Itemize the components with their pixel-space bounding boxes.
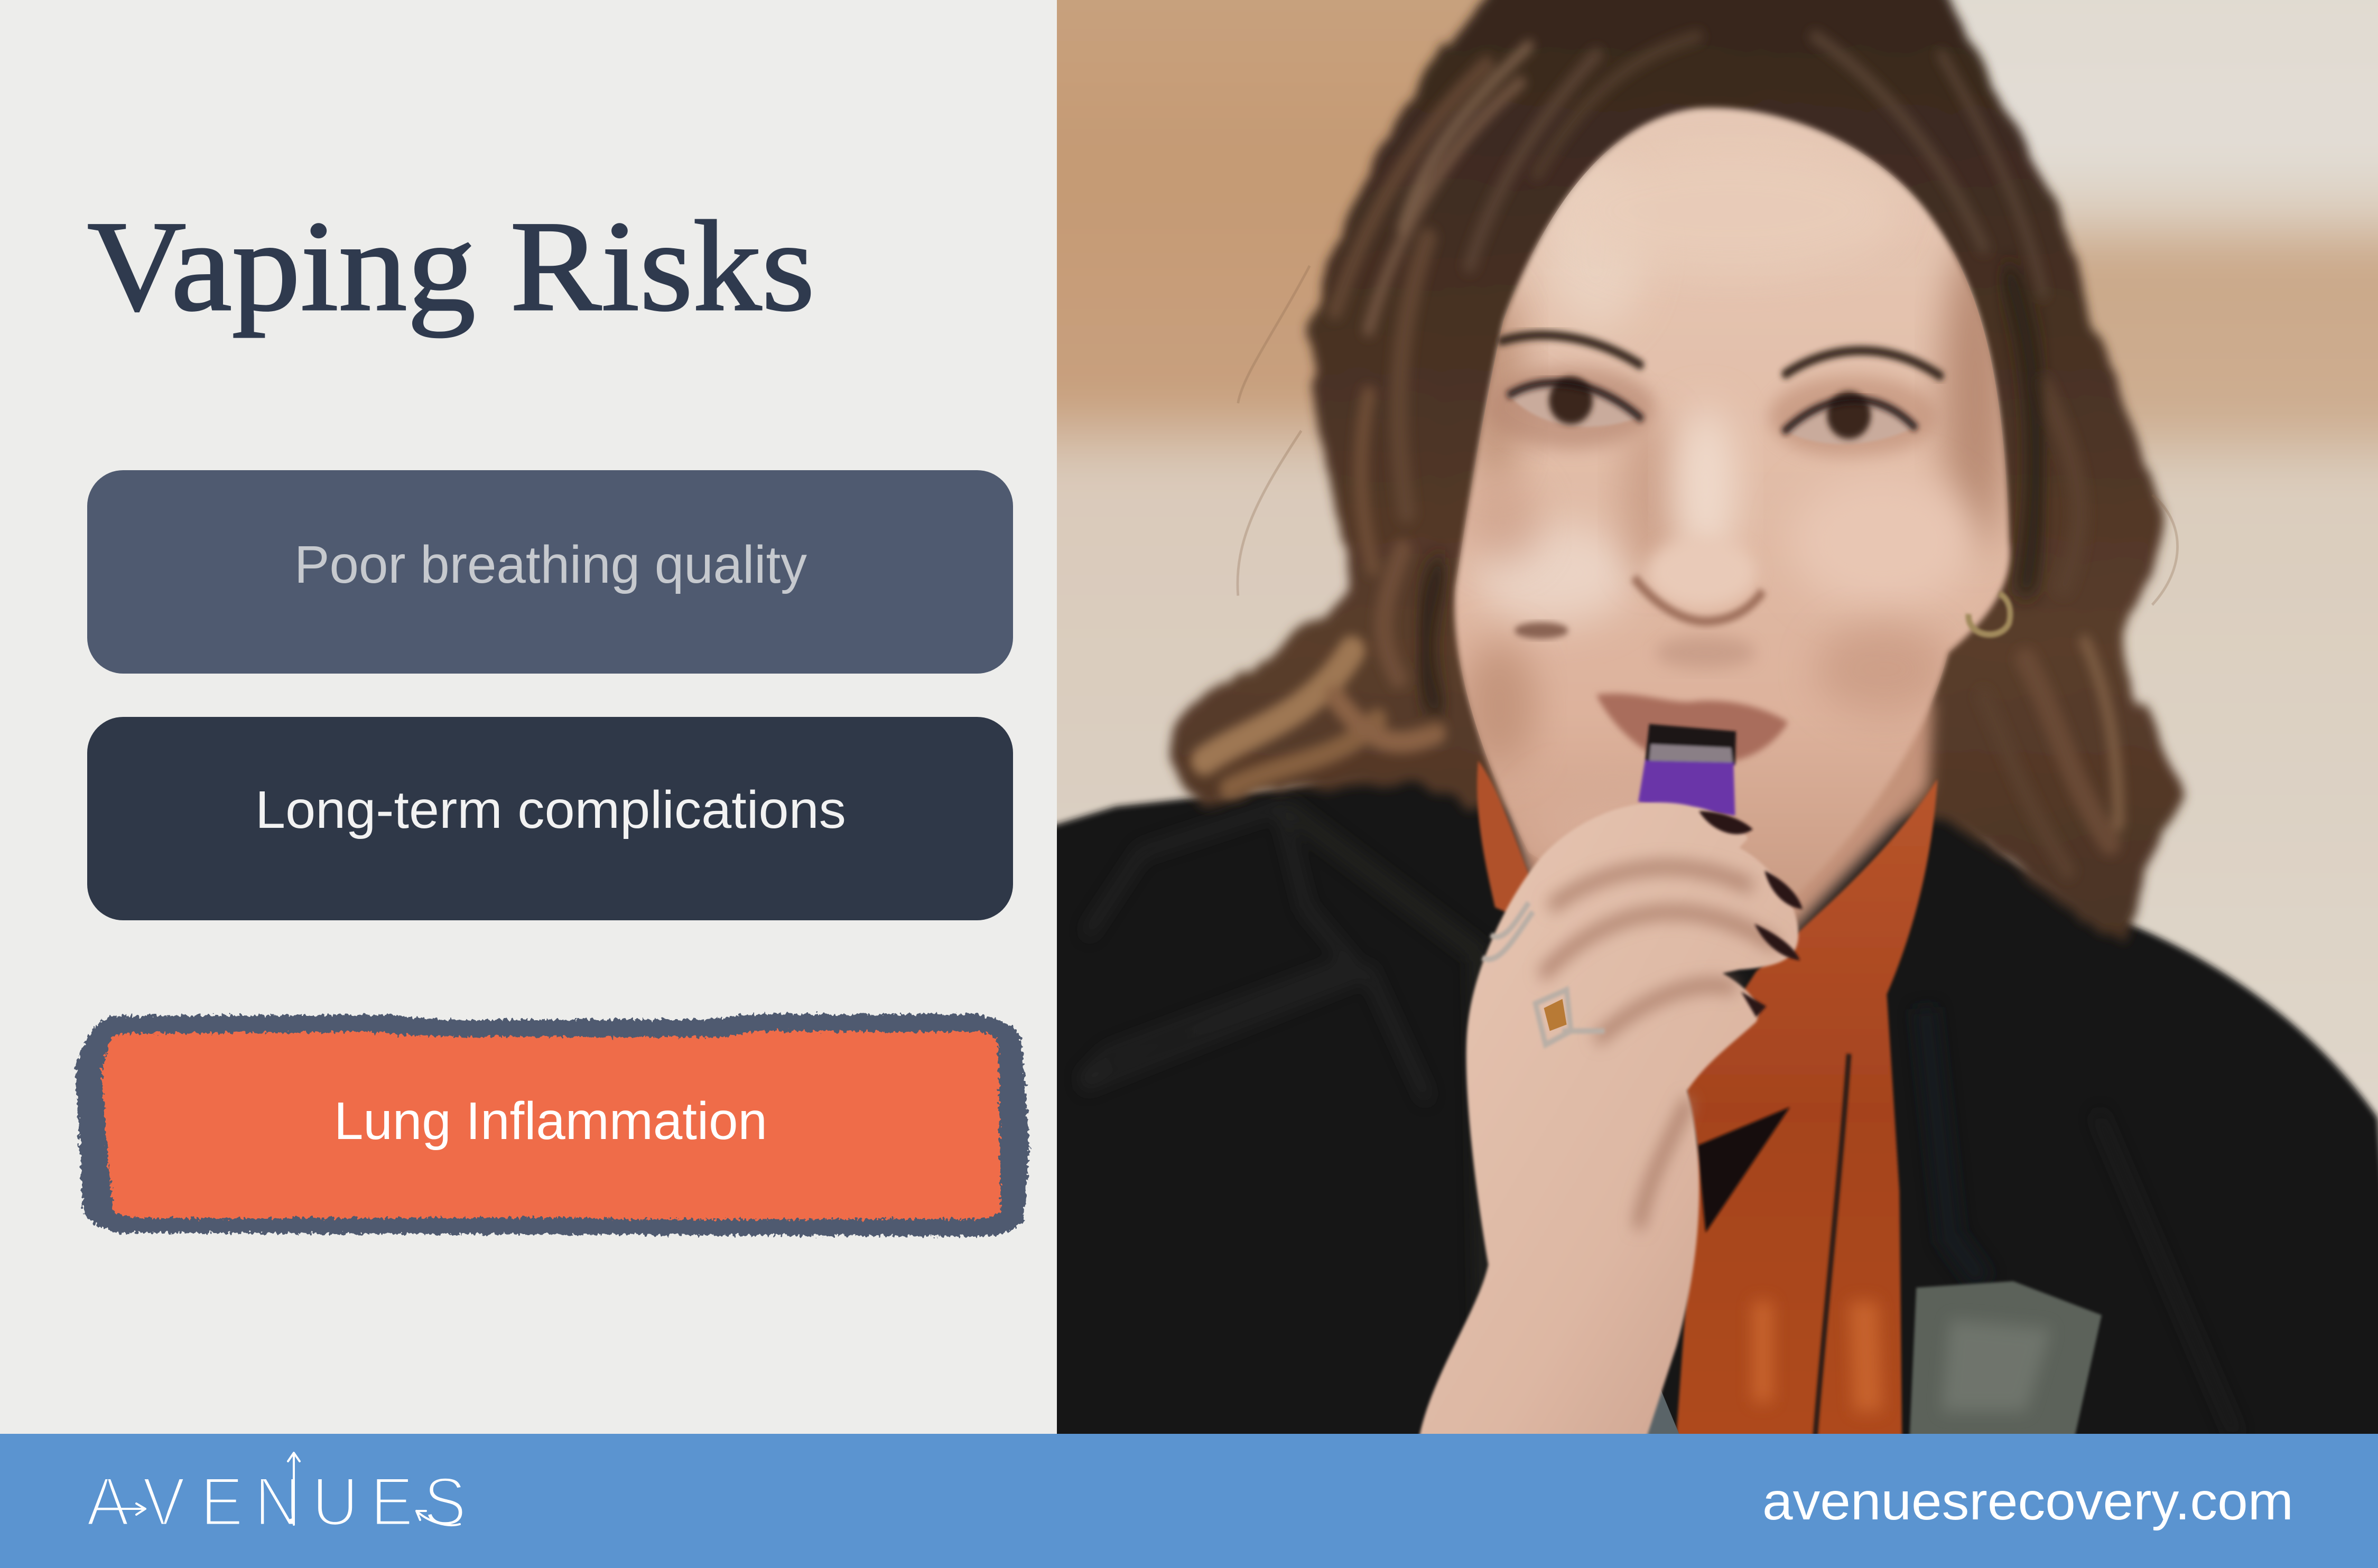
website url: avenuesrecovery.com [1762, 1472, 2293, 1531]
card: Lung Inflammation highlighted [75, 1014, 1029, 1237]
leather collar [1621, 1281, 2102, 1437]
neck [1487, 696, 1933, 944]
eyes [1508, 377, 1916, 444]
card: Poor breathing quality: Poor breathing quality [294, 535, 807, 594]
logo arrows [96, 1453, 460, 1525]
left panel background [0, 0, 1057, 1434]
scarf [1477, 761, 1937, 1437]
card: Long-term complications: Long-term complications [255, 780, 846, 839]
earring [1968, 594, 2010, 634]
hair highlights [1204, 36, 2119, 871]
lips [1596, 694, 1788, 762]
rings [1482, 903, 1604, 1045]
coat lapels [1081, 807, 2236, 1437]
footer bar [0, 1434, 2378, 1568]
face [1455, 108, 2010, 917]
hair [1172, 0, 2182, 944]
heading: Vaping Risks: Vaping Risks [87, 194, 815, 338]
card: Long-term complications [87, 717, 1013, 920]
nose line [1634, 577, 1763, 621]
dimple [1515, 622, 1568, 639]
coat [1040, 756, 2378, 1467]
face shading [1461, 147, 2009, 871]
rough outer border [75, 1014, 1029, 1237]
brows [1502, 335, 1940, 376]
card: Poor breathing quality [87, 470, 1013, 674]
nails [1699, 811, 1803, 1018]
photo background [1057, 0, 2378, 1142]
vape device [1638, 724, 1736, 816]
logo: Avenues: AVENUES [87, 1463, 466, 1540]
hand [1419, 802, 1803, 1437]
card: Lung Inflammation highlighted: Lung Inflammation [334, 1091, 767, 1151]
photo: woman vaping [1057, 0, 2378, 1434]
stray hair wisps [1238, 266, 2178, 605]
